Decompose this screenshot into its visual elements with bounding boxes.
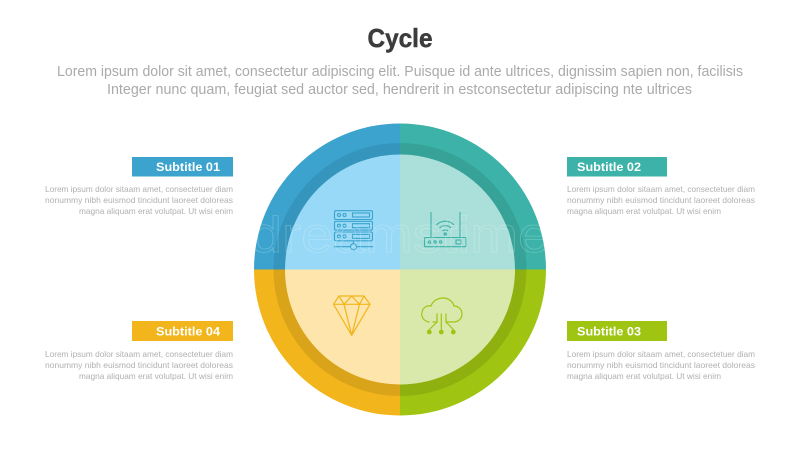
callout: subtitle 02 xyxy=(567,157,755,216)
callout: subtitle 01: nonummy nibh euismod tincidunt laoreet doloreas xyxy=(45,195,233,205)
callout: subtitle 04: Lorem ipsum dolor sitaam amet, consectetuer diam xyxy=(45,349,233,359)
callout: subtitle 01: magna aliquam erat volutpat. Ut wisi enim xyxy=(79,206,233,216)
callout: subtitle 04: Subtitle 04 xyxy=(156,326,221,338)
callout: subtitle 03: Lorem ipsum dolor sitaam amet, consectetuer diam xyxy=(567,349,755,359)
icon: server rack xyxy=(334,211,373,250)
callout: subtitle 02: nonummy nibh euismod tincidunt laoreet doloreas xyxy=(567,195,755,205)
outer ring: green segment xyxy=(400,270,546,416)
outer ring: yellow segment xyxy=(254,270,400,416)
callout: subtitle 04: magna aliquam erat volutpat. Ut wisi enim xyxy=(79,371,233,381)
inner quadrant: blue xyxy=(285,154,400,270)
callout: subtitle 04 xyxy=(45,321,233,381)
callout: subtitle 03: magna aliquam erat volutpat. Ut wisi enim xyxy=(567,371,721,381)
callout: subtitle 02: Subtitle 02 xyxy=(577,162,641,174)
title: Cycle xyxy=(368,23,432,53)
callout: subtitle 01: Subtitle 01 xyxy=(156,162,221,174)
inner quadrant: green xyxy=(400,270,515,384)
callout: subtitle 01: Lorem ipsum dolor sitaam amet, consectetuer diam xyxy=(45,184,233,194)
intro text xyxy=(57,63,743,98)
middle ring: blue segment xyxy=(274,143,400,270)
watermark: dreamstime xyxy=(250,207,550,263)
middle ring: teal segment xyxy=(400,143,526,270)
callout: subtitle 03: nonummy nibh euismod tincidunt laoreet doloreas xyxy=(567,360,755,370)
callout: subtitle 02: Lorem ipsum dolor sitaam amet, consectetuer diam xyxy=(567,184,755,194)
middle ring: green segment xyxy=(400,270,526,396)
callout: subtitle 01 xyxy=(45,157,233,216)
callout: subtitle 03 xyxy=(567,321,755,381)
outer ring: blue segment xyxy=(254,124,400,270)
intro text: Integer nunc quam, feugiat sed auctor sed, hendrerit in estconsectetur adipiscing nte ultrices xyxy=(107,81,692,98)
inner quadrant: teal xyxy=(400,154,515,270)
outer ring: teal segment xyxy=(400,124,546,270)
cycle diagram xyxy=(254,124,546,416)
icon: diamond xyxy=(334,296,370,335)
inner quadrant: yellow xyxy=(285,270,400,384)
callout: subtitle 02: magna aliquam erat volutpat. Ut wisi enim xyxy=(567,206,721,216)
icon: cloud network xyxy=(422,298,462,334)
intro text: Lorem ipsum dolor sit amet, consectetur adipiscing elit. Puisque id ante ultrices, dignissim sapien non, facilisis xyxy=(57,63,743,80)
callout: subtitle 04: nonummy nibh euismod tincidunt laoreet doloreas xyxy=(45,360,233,370)
icon: wifi router xyxy=(424,212,466,247)
callout: subtitle 03: Subtitle 03 xyxy=(577,326,641,338)
middle ring: yellow segment xyxy=(274,270,400,396)
